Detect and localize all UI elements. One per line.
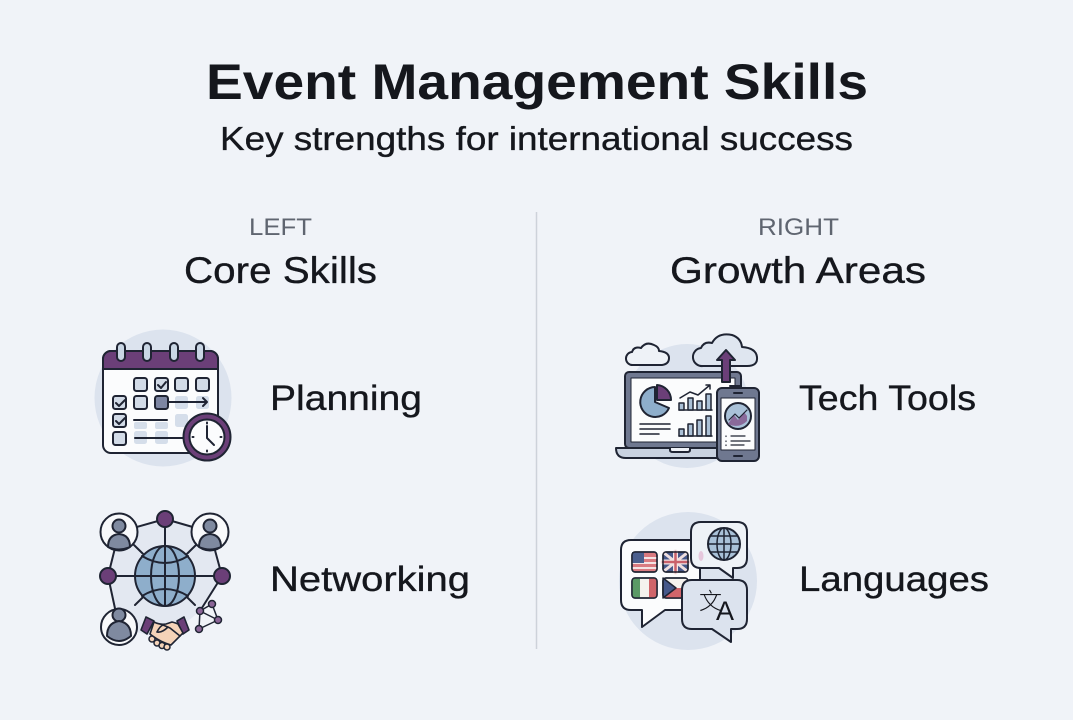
panel: right column bbox=[616, 214, 989, 650]
glyphs: translation: 文 bbox=[699, 582, 722, 616]
glyphs: translation: A bbox=[716, 596, 734, 626]
glyphs: translation bbox=[699, 582, 734, 626]
label: languages: Languages bbox=[799, 560, 989, 599]
right label: RIGHT bbox=[758, 214, 839, 241]
label: tech tools: Tech Tools bbox=[799, 379, 976, 418]
label: planning: Planning bbox=[270, 379, 422, 418]
icon: tech tools bbox=[616, 334, 759, 468]
icon: global network bbox=[100, 511, 230, 650]
icon: languages bbox=[619, 512, 757, 650]
subtitle: Key strengths for international success bbox=[220, 120, 853, 157]
icon: calendar with clock bbox=[94, 330, 232, 466]
left heading: Core Skills bbox=[184, 250, 377, 291]
left label: LEFT bbox=[249, 214, 312, 241]
title: Event Management Skills bbox=[206, 54, 868, 110]
right heading: Growth Areas bbox=[670, 250, 926, 291]
panel: left column bbox=[94, 214, 470, 650]
label: networking: Networking bbox=[270, 560, 470, 599]
